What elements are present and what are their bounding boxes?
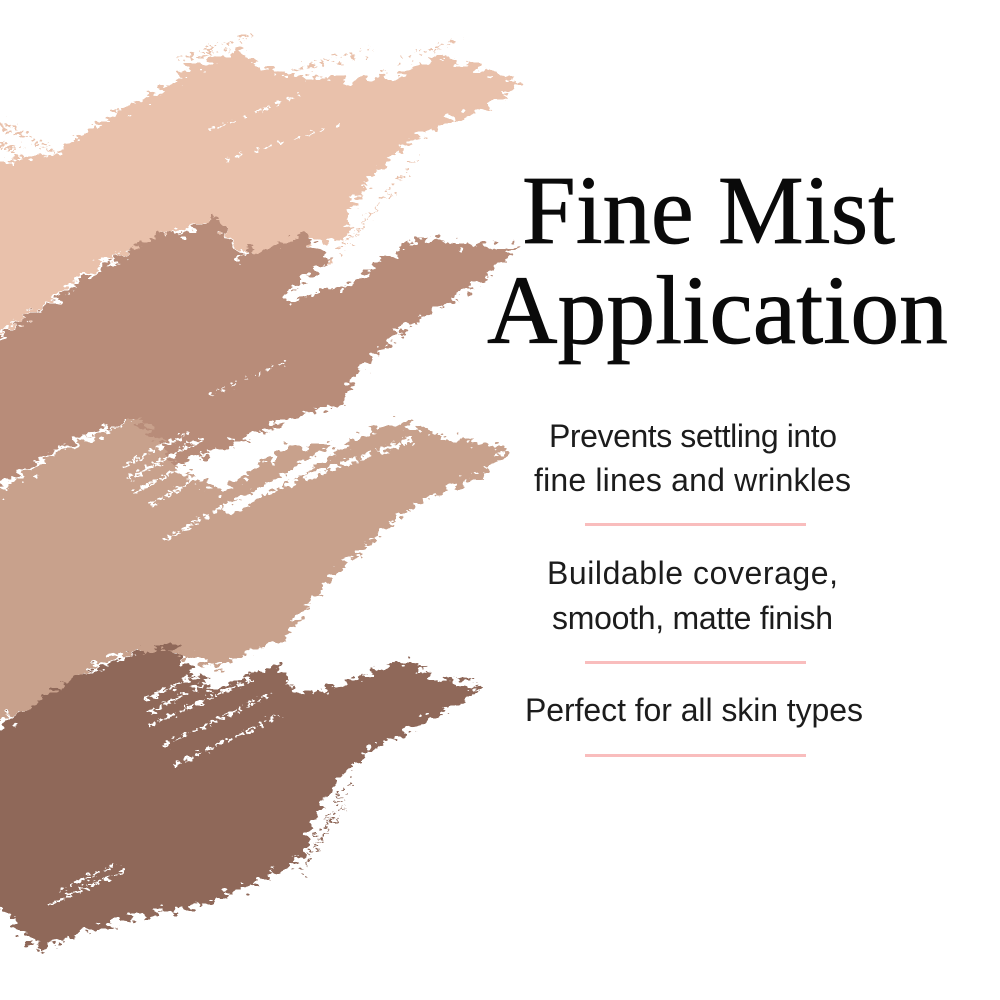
swatch: light peach xyxy=(0,36,520,345)
divider 1 xyxy=(585,523,806,526)
benefit: prevents settling: Prevents settling into xyxy=(549,418,837,454)
swatch: deep brown xyxy=(0,645,482,952)
benefit: prevents settling: fine lines and wrinkles xyxy=(534,462,851,498)
benefit: buildable coverage: Buildable coverage, xyxy=(547,555,838,591)
divider 2 xyxy=(585,661,806,664)
divider 3 xyxy=(585,754,806,757)
title: Application xyxy=(487,257,948,364)
title xyxy=(487,157,948,364)
swatch: rose brown xyxy=(0,216,520,495)
benefit: skin types: Perfect for all skin types xyxy=(525,692,863,728)
title: Fine Mist xyxy=(522,157,895,264)
swatch: tan xyxy=(0,420,510,730)
benefit: buildable coverage xyxy=(547,555,838,636)
paint streak highlights xyxy=(50,95,410,905)
benefit: prevents settling xyxy=(534,418,851,498)
benefit: buildable coverage: smooth, matte finish xyxy=(552,600,833,636)
